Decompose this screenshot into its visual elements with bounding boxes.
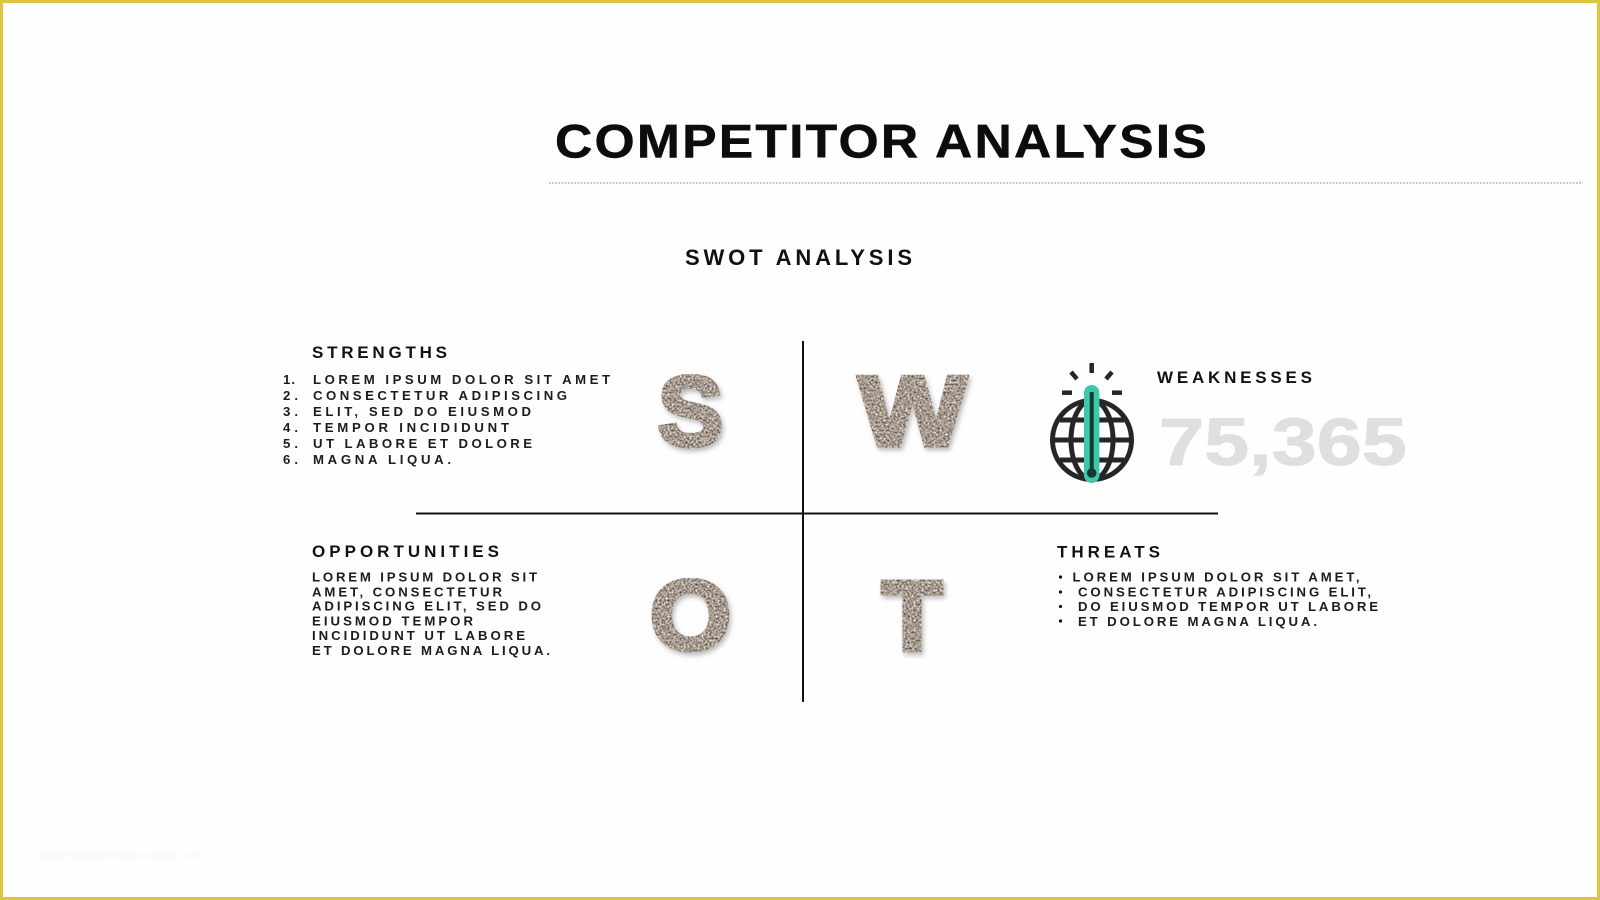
paragraph: opportunities: ADIPISCING ELIT, SED DO bbox=[312, 598, 541, 614]
icon: globe with thermometer bbox=[1052, 363, 1132, 483]
bullet list: threats: CONSECTETUR ADIPISCING ELIT, bbox=[1078, 585, 1371, 600]
list: strengths: 3. bbox=[283, 404, 298, 419]
list: strengths: 1. bbox=[283, 372, 295, 387]
list: strengths: 2. bbox=[283, 388, 298, 403]
heading: threats: THREATS bbox=[1057, 542, 1160, 562]
title: COMPETITOR ANALYSIS bbox=[555, 114, 1209, 168]
panel: opportunities bbox=[312, 542, 550, 658]
list: strengths: LOREM IPSUM DOLOR SIT AMET bbox=[313, 372, 610, 387]
letter T: T bbox=[882, 561, 942, 671]
panel: threats bbox=[1057, 542, 1378, 629]
letter S: S bbox=[658, 356, 723, 466]
heading: weaknesses: WEAKNESSES bbox=[1157, 368, 1312, 387]
watermark: www.heritagechristiancollege.com bbox=[39, 850, 200, 862]
bullet list: threats: ET DOLORE MAGNA LIQUA. bbox=[1078, 614, 1317, 629]
quadrant axes bbox=[416, 341, 1218, 702]
list: strengths bbox=[283, 372, 610, 467]
stat: 75,365: 75,365 bbox=[1159, 405, 1407, 480]
list: strengths: ELIT, SED DO EIUSMOD bbox=[313, 404, 531, 419]
paragraph: opportunities: INCIDIDUNT UT LABORE bbox=[312, 628, 525, 643]
subtitle: SWOT ANALYSIS bbox=[685, 245, 912, 270]
letter W: W bbox=[859, 356, 967, 466]
list: strengths: CONSECTETUR ADIPISCING bbox=[313, 388, 567, 403]
paragraph: opportunities: ET DOLORE MAGNA LIQUA. bbox=[312, 643, 550, 658]
bullet list: threats: DO EIUSMOD TEMPOR UT LABORE bbox=[1078, 599, 1378, 614]
list: strengths: 5. bbox=[283, 436, 298, 451]
paragraph: opportunities: AMET, CONSECTETUR bbox=[312, 585, 502, 600]
bullet list: threats bbox=[1059, 570, 1378, 629]
paragraph: opportunities: LOREM IPSUM DOLOR SIT bbox=[312, 570, 537, 585]
panel: weaknesses bbox=[1157, 368, 1407, 480]
heading: opportunities: OPPORTUNITIES bbox=[312, 542, 499, 561]
letter O: O bbox=[650, 560, 731, 670]
list: strengths: MAGNA LIQUA. bbox=[313, 452, 451, 467]
panel: strengths bbox=[283, 343, 610, 467]
paragraph: opportunities: EIUSMOD TEMPOR bbox=[312, 614, 473, 629]
list: strengths: UT LABORE ET DOLORE bbox=[313, 436, 532, 451]
heading: strengths: STRENGTHS bbox=[312, 343, 447, 362]
list: strengths: 6. bbox=[283, 452, 298, 467]
bullet list: threats: LOREM IPSUM DOLOR SIT AMET, bbox=[1072, 570, 1360, 585]
dotted divider bbox=[549, 182, 1583, 184]
paragraph: opportunities bbox=[312, 570, 550, 658]
list: strengths: TEMPOR INCIDIDUNT bbox=[313, 420, 509, 435]
list: strengths: 4. bbox=[283, 420, 298, 435]
